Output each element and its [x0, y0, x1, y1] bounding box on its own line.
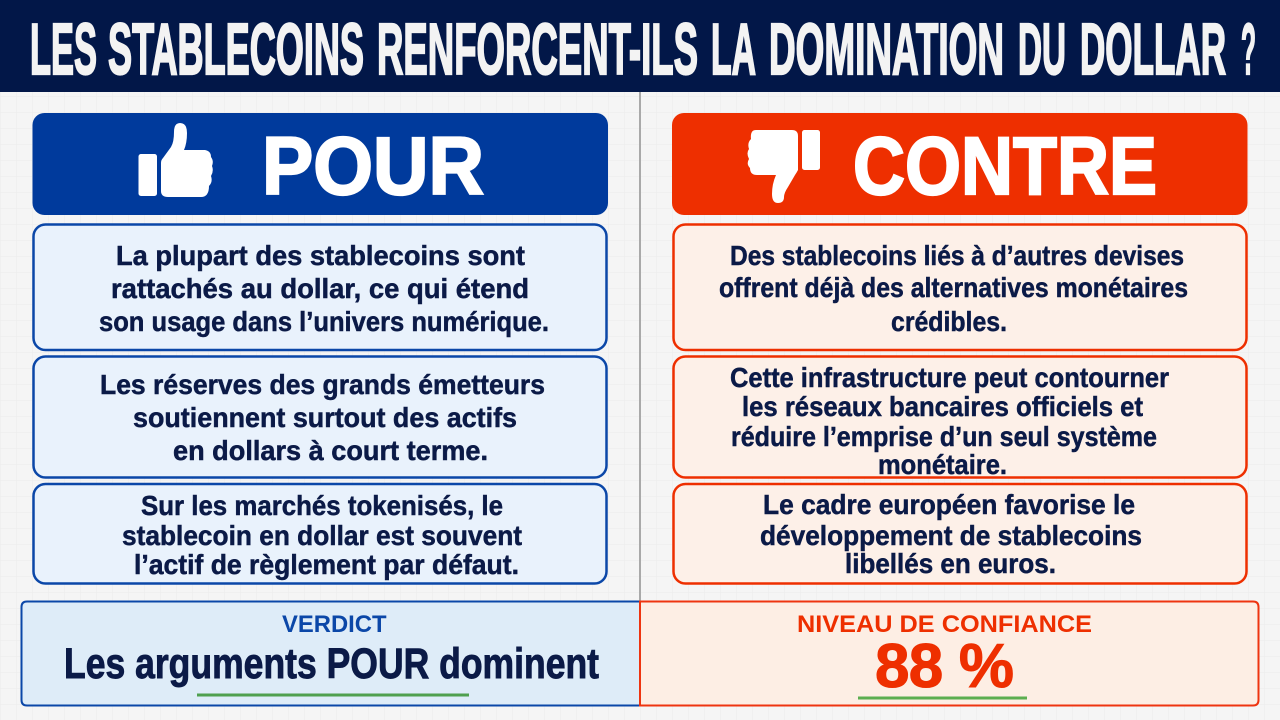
title banner: RENFORCENT-ILS: [377, 10, 698, 90]
panel: pour: [32, 113, 608, 584]
argument pour 1: rattachés au dollar, ce qui étend: [111, 273, 529, 304]
argument pour 1: [34, 224, 606, 350]
title banner: STABLECOINS: [108, 10, 364, 90]
contre heading: CONTRE: [853, 121, 1157, 212]
verdict underline: [197, 694, 469, 696]
argument pour 3: l’actif de règlement par défaut.: [134, 549, 519, 580]
argument contre 2: réduire l’emprise d’un seul système: [731, 421, 1157, 452]
pour header: [32, 113, 608, 215]
confidence underline: [858, 696, 1027, 700]
argument contre 2: les réseaux bancaires officiels et: [742, 391, 1143, 422]
panel: contre: [672, 113, 1248, 584]
argument contre 3: [674, 484, 1246, 584]
title banner: LES: [30, 10, 97, 90]
argument contre 2: [674, 356, 1246, 480]
argument contre 3: développement de stablecoins: [760, 520, 1142, 551]
argument pour 3: stablecoin en dollar est souvent: [122, 520, 522, 551]
title banner: DU: [1018, 10, 1066, 90]
title banner: [0, 0, 1280, 92]
argument pour 3: Sur les marchés tokenisés, le: [141, 490, 503, 521]
verdict label: VERDICT: [282, 611, 387, 638]
pour heading: POUR: [262, 121, 484, 212]
icon: thumbs down: [748, 130, 820, 203]
argument contre 1: Des stablecoins liés à d’autres devises: [730, 240, 1184, 271]
argument pour 2: Les réserves des grands émetteurs: [100, 369, 545, 400]
argument pour 1: son usage dans l’univers numérique.: [99, 306, 549, 337]
argument contre 3: libellés en euros.: [845, 548, 1056, 579]
argument contre 3: Le cadre européen favorise le: [763, 489, 1135, 520]
contre header: [672, 113, 1248, 215]
title banner: LA: [711, 10, 756, 90]
argument pour 2: [34, 356, 606, 478]
argument pour 2: soutiennent surtout des actifs: [133, 402, 517, 433]
icon: thumbs up: [138, 123, 213, 197]
confidence value: 88 %: [875, 632, 1014, 701]
argument contre 2: monétaire.: [878, 449, 1007, 480]
argument pour 3: [34, 484, 606, 584]
argument contre 1: [674, 224, 1246, 350]
verdict panel: [22, 602, 640, 706]
confidence label: NIVEAU DE CONFIANCE: [797, 611, 1092, 638]
argument contre 1: offrent déjà des alternatives monétaires: [719, 272, 1188, 303]
verdict statement: Les arguments POUR dominent: [64, 640, 599, 688]
argument pour 1: La plupart des stablecoins sont: [116, 240, 525, 271]
title banner: DOMINATION: [769, 10, 1004, 90]
argument pour 2: en dollars à court terme.: [173, 435, 488, 466]
argument contre 1: crédibles.: [891, 306, 1007, 337]
argument contre 2: Cette infrastructure peut contourner: [730, 362, 1169, 393]
confidence panel: [640, 602, 1258, 706]
